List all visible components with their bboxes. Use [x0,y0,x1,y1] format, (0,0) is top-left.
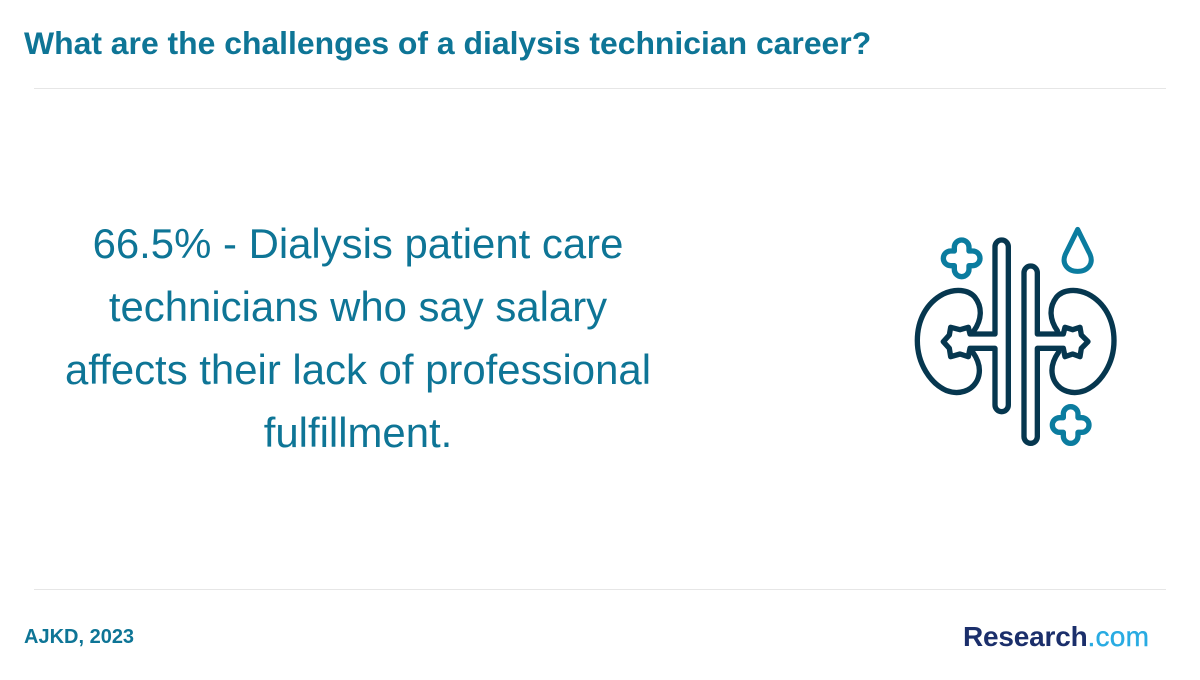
icon: water drop [1064,229,1091,271]
source: AJKD, 2023 [24,626,134,648]
icon: upper cross [943,240,980,277]
main statistic text: fulfillment. [264,409,452,456]
title: What are the challenges of a dialysis technician career? [24,25,871,61]
main statistic text: technicians who say salary [109,283,607,330]
icon: kidneys with tubes, drop and crosses [914,226,1117,446]
icon: left kidney and tube [917,240,1008,412]
main statistic text: 66.5% - Dialysis patient care [93,220,623,267]
main statistic text [65,220,651,456]
logo: Research.com: Research.com [963,621,1149,652]
main statistic text: affects their lack of professional [65,346,651,393]
icon: lower cross [1052,407,1089,443]
icon: right kidney and tube [1024,266,1114,443]
